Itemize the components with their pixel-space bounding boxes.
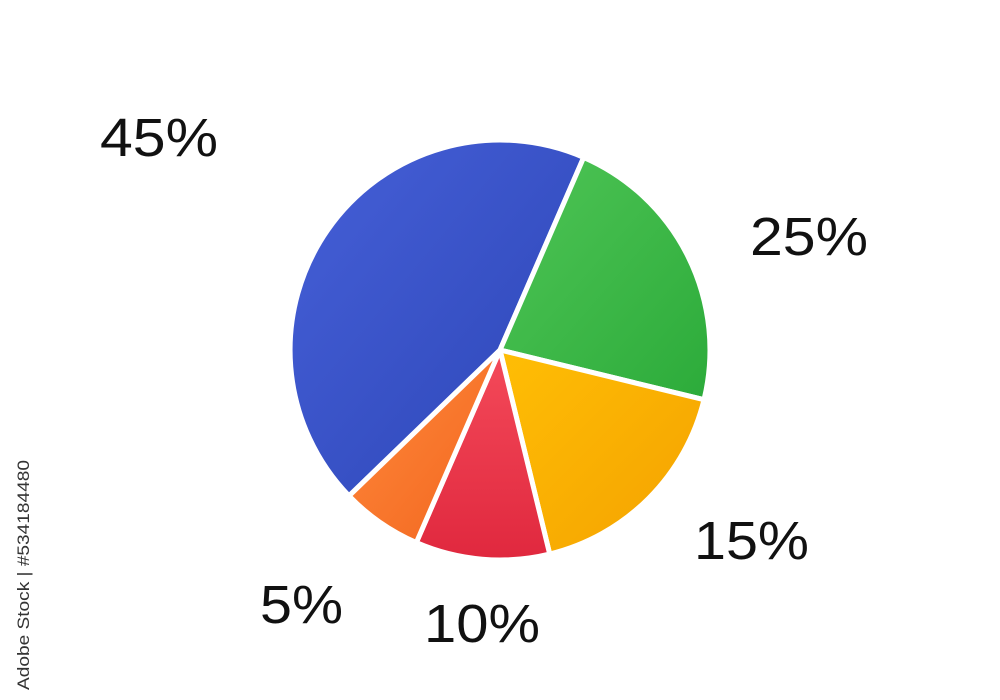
label 25%: 25% (750, 207, 868, 267)
pie chart (290, 140, 710, 560)
labels (100, 108, 868, 654)
slice: green 25% (500, 157, 710, 400)
label 45%: 45% (100, 108, 218, 168)
slice: orange 5% (349, 350, 500, 543)
label 5%: 5% (260, 575, 343, 635)
slice: blue 45% (290, 140, 584, 496)
slice: yellow 15% (500, 350, 704, 554)
label 10%: 10% (424, 594, 540, 654)
watermark id: Adobe Stock | #534184480 (14, 460, 33, 690)
slice: red 10% (416, 350, 550, 560)
label 15%: 15% (694, 511, 809, 571)
